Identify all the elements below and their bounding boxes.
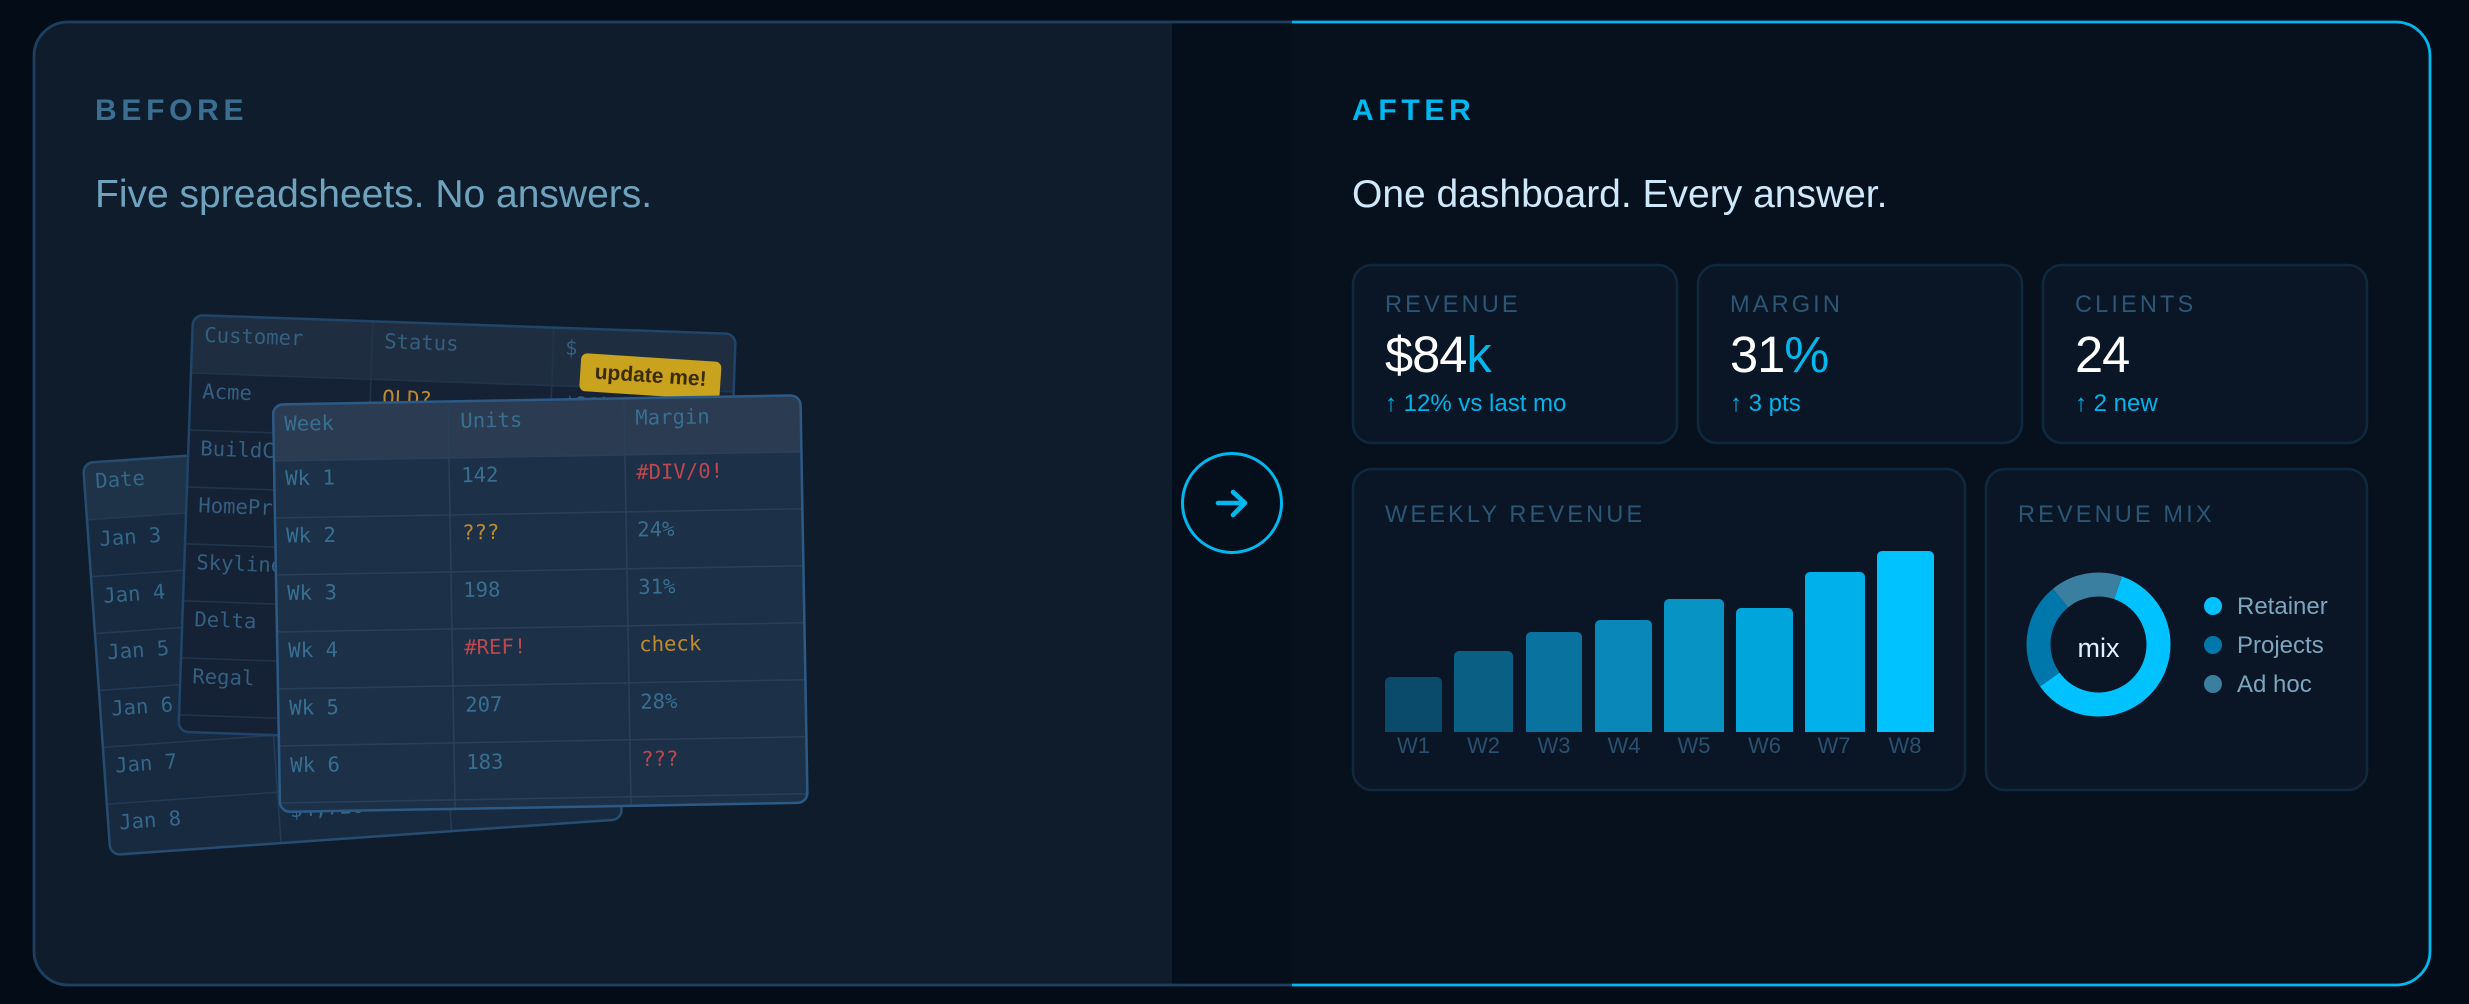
KPI card: revenue: REVENUE — [1385, 292, 1521, 318]
donut legend: Retainer — [2237, 593, 2328, 620]
donut panel: revenue mix — [1986, 469, 2367, 790]
KPI card: margin: ↑ 3 pts — [1730, 390, 1801, 417]
KPI card: margin: MARGIN — [1730, 292, 1843, 318]
spreadsheet: weekly units: #REF! — [464, 634, 526, 659]
bar labels: W7 — [1818, 733, 1850, 758]
spreadsheet stack — [83, 315, 808, 855]
spreadsheet: customers: Customer — [204, 323, 304, 350]
chart title: WEEKLY REVENUE — [1385, 502, 1645, 528]
spreadsheet: weekly units: 24% — [637, 517, 675, 542]
donut chart: mix — [2078, 633, 2120, 663]
spreadsheet: weekly units: Units — [460, 408, 523, 433]
spreadsheet: weekly units: 28% — [640, 689, 678, 714]
KPI card: clients: ↑ 2 new — [2075, 390, 2158, 417]
bar labels: W1 — [1397, 733, 1430, 758]
spreadsheet: customers: BuildCo — [200, 436, 288, 463]
spreadsheet: dates: Jan 4 — [102, 580, 166, 608]
spreadsheet: weekly units — [273, 395, 808, 812]
spreadsheet: weekly units: Margin — [635, 404, 710, 430]
sticky note: update me — [579, 353, 722, 400]
spreadsheet: weekly units: #DIV/0! — [636, 459, 723, 484]
bar labels — [1397, 733, 1922, 758]
spreadsheet: dates: Jan 8 — [118, 806, 182, 834]
spreadsheet: weekly units: Wk 3 — [287, 580, 337, 605]
sticky note: update me: update me! — [594, 361, 707, 391]
panel backgrounds — [36, 24, 1172, 984]
donut title: REVENUE MIX — [2018, 502, 2215, 528]
spreadsheet: dates: $4,720 — [289, 793, 365, 822]
spreadsheet: weekly units: 183 — [466, 750, 504, 774]
spreadsheet: weekly units: 198 — [463, 577, 501, 602]
KPI card: clients: 24 — [2075, 326, 2129, 383]
bar labels: W6 — [1748, 733, 1781, 758]
bar chart panel: weekly revenue — [1353, 469, 1965, 790]
spreadsheet: customers: Skyline — [196, 550, 284, 577]
arrow badge — [1182, 454, 1282, 552]
KPI card: revenue — [1353, 265, 1677, 443]
KPI card: clients — [2043, 265, 2367, 443]
KPI card: revenue: ↑ 12% vs last mo — [1385, 390, 1566, 417]
donut legend — [2204, 593, 2328, 698]
spreadsheet: weekly units: ??? — [641, 746, 679, 771]
donut legend: Projects — [2237, 632, 2324, 659]
spreadsheet: weekly units: Wk 2 — [286, 523, 336, 548]
before label: BEFORE — [95, 94, 248, 127]
spreadsheet: weekly units: check — [639, 631, 702, 656]
KPI card: revenue: $84k — [1385, 326, 1492, 383]
card outline: before side — [34, 22, 1292, 985]
spreadsheet: weekly units: Wk 6 — [290, 752, 340, 777]
spreadsheet: dates: Jan 7 — [114, 749, 178, 777]
spreadsheet: dates: Jan 5 — [106, 636, 170, 664]
card outline: after side — [1292, 22, 2430, 985]
spreadsheet: weekly units: 207 — [465, 692, 503, 717]
KPI card: margin: 31% — [1730, 326, 1828, 383]
bars — [1385, 551, 1934, 732]
spreadsheet: customers: Acme — [202, 379, 252, 405]
spreadsheet: dates: Date — [94, 466, 146, 493]
after headline: One dashboard. Every answer. — [1352, 173, 1887, 216]
spreadsheet: weekly units: ??? — [462, 520, 500, 545]
spreadsheet: weekly units: Week — [284, 411, 335, 436]
spreadsheet: weekly units: 142 — [461, 463, 499, 487]
KPI card: clients: CLIENTS — [2075, 292, 2196, 318]
donut chart — [2022, 568, 2175, 721]
spreadsheet: dates: Jan 6 — [110, 692, 174, 721]
spreadsheet: weekly units: Wk 1 — [285, 465, 335, 490]
bar labels: W3 — [1538, 733, 1570, 758]
spreadsheet: customers: Regal — [192, 664, 255, 690]
bar labels: W5 — [1678, 733, 1710, 758]
before headline: Five spreadsheets. No answers. — [95, 173, 652, 216]
spreadsheet: customers: OLD? — [382, 386, 432, 411]
bar labels: W8 — [1888, 733, 1922, 758]
spreadsheet: dates — [83, 427, 622, 855]
spreadsheet: customers: Delta — [194, 607, 257, 633]
spreadsheet: customers: Status — [384, 329, 459, 356]
after label: AFTER — [1352, 94, 1476, 127]
spreadsheet: customers: HomePro — [198, 493, 286, 520]
bar labels: W2 — [1467, 733, 1500, 758]
bar labels: W4 — [1608, 733, 1640, 758]
spreadsheet: weekly units: Wk 5 — [289, 695, 339, 720]
spreadsheet: customers: $ — [565, 336, 578, 360]
spreadsheet: customers — [178, 315, 736, 751]
KPI card: margin — [1698, 265, 2022, 443]
spreadsheet: weekly units: 31% — [638, 574, 676, 599]
donut legend: Ad hoc — [2237, 671, 2312, 698]
spreadsheet: customers: $21k — [563, 392, 614, 418]
spreadsheet: dates: Jan 3 — [99, 523, 162, 551]
spreadsheet: weekly units: Wk 4 — [288, 638, 338, 662]
